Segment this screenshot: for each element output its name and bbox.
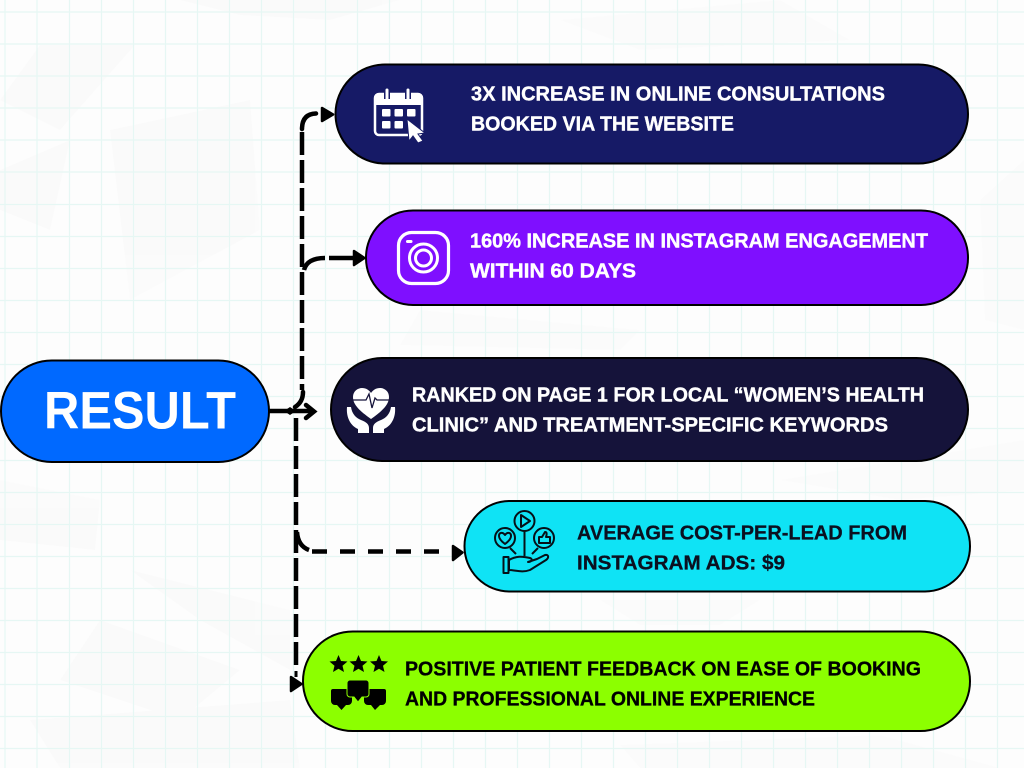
panel: patient feedback bbox=[303, 632, 970, 731]
text: ranking result bbox=[412, 384, 924, 436]
text: consultations result: 3X INCREASE IN ONLINE CONSULTATIONS bbox=[471, 82, 885, 106]
panel: instagram engagement bbox=[366, 210, 968, 305]
text: consultations result bbox=[471, 82, 885, 136]
text: instagram result bbox=[470, 230, 928, 282]
text: ranking result: CLINIC” AND TREATMENT-SPECIFIC KEYWORDS bbox=[412, 414, 888, 436]
icon: calendar with cursor bbox=[375, 89, 425, 143]
arrow: to instagram panel bbox=[304, 251, 364, 270]
icon: hand holding social reactions bbox=[495, 511, 554, 573]
panel: cost per lead bbox=[464, 501, 970, 592]
panel: online consultations bbox=[336, 64, 968, 164]
panel: local search ranking bbox=[331, 358, 968, 461]
panel: result label bbox=[1, 360, 269, 462]
text: ranking result: RANKED ON PAGE 1 FOR LOCAL “WOMEN’S HEALTH bbox=[412, 384, 924, 406]
connectors: dashed arrows from result to each outcome bbox=[269, 108, 462, 691]
icon: heart held by hands bbox=[347, 388, 395, 433]
arrow: to consultations panel bbox=[295, 108, 333, 407]
arrow: to cost-per-lead panel bbox=[297, 532, 462, 560]
arrow: down to patient feedback panel bbox=[291, 418, 302, 691]
icon: instagram logo bbox=[398, 232, 448, 284]
text: feedback result bbox=[405, 658, 921, 710]
icon: stars and speech bubbles bbox=[330, 655, 388, 710]
text: feedback result: AND PROFESSIONAL ONLINE EXPERIENCE bbox=[405, 688, 815, 710]
text: feedback result: POSITIVE PATIENT FEEDBACK ON EASE OF BOOKING bbox=[405, 658, 921, 680]
text: instagram result: 160% INCREASE IN INSTAGRAM ENGAGEMENT bbox=[470, 230, 928, 252]
text: cost per lead result: INSTAGRAM ADS: $9 bbox=[577, 552, 785, 574]
text: consultations result: BOOKED VIA THE WEBSITE bbox=[471, 112, 734, 136]
arrow: result stem and chevron bbox=[269, 405, 314, 418]
text: cost per lead result: AVERAGE COST-PER-LEAD FROM bbox=[577, 522, 907, 544]
text: cost per lead result bbox=[577, 522, 907, 574]
text: instagram result: WITHIN 60 DAYS bbox=[470, 260, 636, 282]
panel: result label: RESULT bbox=[44, 382, 236, 440]
